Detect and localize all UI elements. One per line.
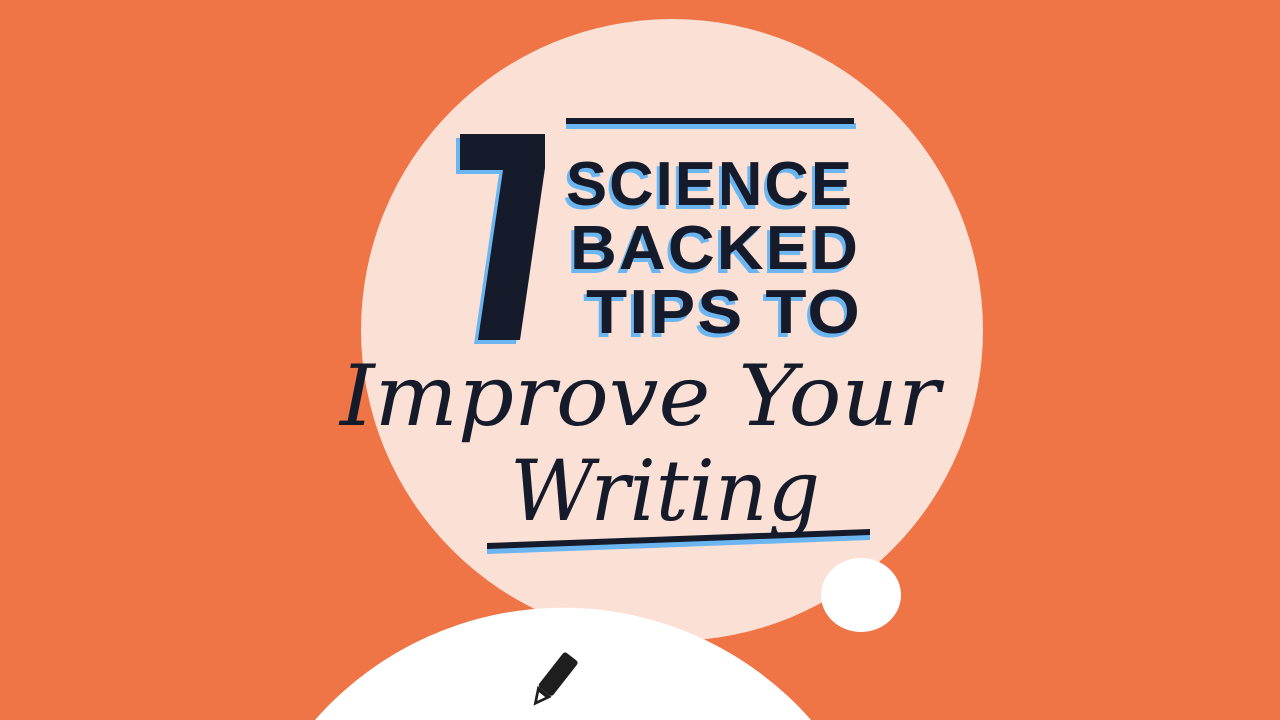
words: science backed tips to: SCIENCE xyxy=(566,150,854,219)
title xyxy=(456,118,862,351)
words: science backed tips to: TIPS TO xyxy=(583,282,859,351)
script subtitle: Improve Your xyxy=(338,347,945,445)
number 7 xyxy=(456,134,545,344)
words: science backed tips to: BACKED xyxy=(567,218,857,287)
script subtitle xyxy=(338,347,945,540)
decoration: small white oval xyxy=(821,558,901,632)
panel: pink title circle xyxy=(361,19,983,641)
words: science backed tips to: SCIENCE xyxy=(563,154,851,223)
top rule xyxy=(566,118,856,129)
bottom rule xyxy=(487,529,870,554)
words: science backed tips to: TIPS TO xyxy=(586,278,862,347)
panel: white bottom circle xyxy=(315,608,811,720)
script subtitle: Writing xyxy=(510,442,820,540)
icon: pencil xyxy=(526,651,579,711)
words: science backed tips to: BACKED xyxy=(570,214,860,283)
words: science backed tips to xyxy=(563,150,862,351)
